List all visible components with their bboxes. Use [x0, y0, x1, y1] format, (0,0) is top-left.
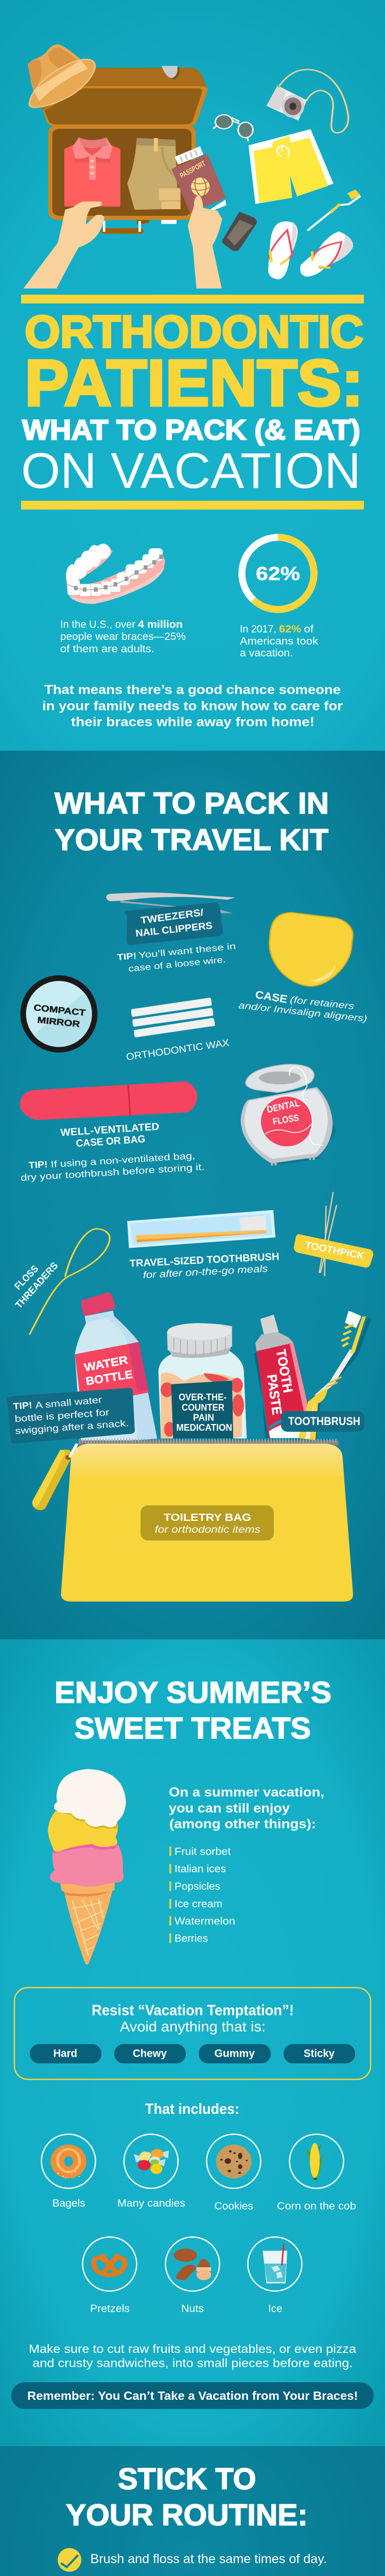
conclusion text: in your family needs to know how to care for	[42, 699, 343, 713]
checklist item 1: Brush and floss at the same times of day.	[91, 2552, 327, 2566]
icon: toothpaste tube: TOOTH	[273, 1348, 296, 1394]
suitcase base and handle	[48, 125, 196, 234]
label: case: CASE	[254, 989, 288, 1006]
callout: water bottle tip: A small water	[35, 1395, 102, 1411]
smartphone	[222, 212, 257, 251]
illustration: open suitcase with travel items	[23, 44, 360, 289]
label: case: and/or Invisalign aligners)	[238, 1000, 367, 1024]
icon: compact mirror: MIRROR	[37, 1015, 80, 1029]
passport and tickets	[171, 146, 226, 214]
label: tweezers and tip: You’ll want these in	[138, 941, 236, 960]
icon: toothpicks with label: TOOTHPICK	[304, 1240, 365, 1262]
stat: 62% took vacation: 62%	[279, 623, 301, 635]
label: orthodontic wax: ORTHODONTIC WAX	[126, 1038, 230, 1063]
donut chart: 62%: 62%	[256, 563, 300, 584]
icon: pretzel	[94, 2255, 125, 2275]
pill: hard: Hard	[54, 2047, 77, 2060]
callout: water bottle tip: TIP!	[13, 1400, 32, 1412]
title	[21, 295, 364, 510]
conclusion text	[42, 683, 343, 730]
label: floss threaders: THREADERS	[13, 1260, 60, 1311]
text: what you can still enjoy: (among other things):	[169, 1817, 316, 1832]
suitcase lid	[42, 66, 207, 126]
list: treats	[169, 1846, 235, 1944]
callout: water bottle tip	[7, 1388, 135, 1444]
list: treats: Berries	[174, 1933, 208, 1944]
sunglasses	[213, 115, 253, 141]
folded red shirt	[64, 137, 120, 207]
icon: corn on the cob	[306, 2143, 328, 2180]
icon: tweezers	[106, 892, 235, 913]
food grid: foods to avoid	[41, 2134, 356, 2314]
icon: toiletry bag: for orthodontic items	[154, 1524, 261, 1535]
heading: WHAT TO PACK IN	[55, 787, 329, 820]
label: travel-sized toothbrush: for after on-the-go meals	[143, 1263, 269, 1281]
stat: 62% took vacation: Americans took	[240, 636, 319, 647]
food labels: Corn on the cob	[277, 2201, 356, 2212]
camera with strap	[267, 70, 348, 133]
heading	[66, 2462, 308, 2532]
food labels	[52, 2198, 356, 2314]
callout: water bottle tip: bottle is perfect for	[14, 1407, 110, 1424]
label: ventilated case and tip: CASE OR BAG	[76, 1133, 146, 1149]
list: treats: Italian ices	[174, 1863, 226, 1875]
label: tweezers and tip: TIP!	[117, 951, 137, 962]
toothbrush	[308, 190, 360, 230]
illustration: teeth with braces	[66, 544, 165, 604]
pill: chewy	[114, 2044, 186, 2063]
text: cut food into small pieces: and crusty sandwiches, into small pieces before eating.	[32, 2357, 353, 2370]
heading	[55, 787, 329, 857]
callout: resist vacation temptation: Avoid anything that is:	[120, 2019, 266, 2035]
icon: pain medication jar	[159, 1323, 247, 1438]
panel: hero introduction	[0, 0, 385, 751]
flip flop right	[300, 231, 353, 277]
pill: hard	[30, 2044, 101, 2063]
banner: remember: Remember: You Can’t Take a Vacation from Your Braces!	[27, 2389, 358, 2402]
icon: pain medication jar: OVER-THE-	[179, 1392, 226, 1402]
stat: 62% took vacation: a vacation.	[240, 648, 293, 659]
conclusion text: That means there’s a good chance someone	[44, 683, 341, 697]
label: ventilated case and tip: TIP!	[28, 1159, 48, 1171]
food labels: Pretzels	[90, 2303, 130, 2314]
icon: pain medication jar: PAIN	[193, 1413, 214, 1423]
icon: ventilated case	[20, 1081, 197, 1120]
title: ON VACATION	[21, 443, 361, 499]
list: treats: Fruit sorbet	[174, 1846, 231, 1858]
heading: STICK TO	[118, 2462, 256, 2496]
label: case: (for retainers	[290, 994, 355, 1011]
icon: water bottle	[75, 1292, 157, 1444]
stat: 4 million wear braces: people wear braces—25%	[60, 631, 186, 642]
food labels: Nuts	[181, 2303, 204, 2314]
heading: YOUR TRAVEL KIT	[55, 823, 328, 857]
pill: sticky	[284, 2044, 355, 2063]
label: ventilated case and tip: WELL-VENTILATED	[60, 1121, 160, 1139]
label: ventilated case and tip: dry your toothbrush before storing it.	[21, 1162, 205, 1183]
hand holding passport	[188, 195, 222, 289]
label: case	[238, 989, 367, 1024]
icon: retainer case	[269, 912, 353, 986]
title: WHAT TO PACK (& EAT)	[22, 414, 360, 446]
icon: floss threader	[29, 1229, 110, 1334]
food labels: Bagels	[52, 2198, 85, 2209]
icon: toiletry bag: TOILETRY BAG	[164, 1512, 251, 1523]
pill: sticky: Sticky	[304, 2047, 335, 2060]
stat: 4 million wear braces: In the U.S., over	[60, 619, 135, 631]
hand holding suitcase	[23, 201, 104, 289]
icon: pain medication jar: COUNTER	[182, 1402, 224, 1413]
food labels: Many candies	[117, 2198, 185, 2209]
folded khaki shorts	[127, 138, 181, 210]
icon: pain medication jar: MEDICATION	[176, 1422, 232, 1433]
icon: cookie	[216, 2144, 251, 2178]
stat: 62% took vacation	[240, 623, 319, 659]
icon: compact mirror	[21, 975, 98, 1053]
text: what you can still enjoy	[169, 1785, 324, 1832]
icon: bagel	[50, 2144, 86, 2178]
stat: 62% took vacation: In 2017,	[240, 623, 276, 635]
callout: water bottle tip: swigging after a snack.	[15, 1418, 129, 1436]
icon: water bottle: BOTTLE	[85, 1367, 134, 1388]
icon: toothbrush	[299, 1311, 370, 1440]
label: tweezers and tip: NAIL CLIPPERS	[135, 920, 213, 939]
pill: chewy: Chewy	[133, 2047, 167, 2060]
label: tweezers and tip	[117, 903, 236, 974]
conclusion text: their braces while away from home!	[71, 715, 314, 730]
label: travel-sized toothbrush	[129, 1251, 279, 1281]
stat: 4 million wear braces: 4 million	[138, 619, 183, 631]
icon: toothpaste tube	[254, 1315, 316, 1438]
icon: water bottle: WATER	[83, 1353, 129, 1374]
banner: remember	[11, 2382, 374, 2409]
text: cut food into small pieces	[29, 2342, 356, 2370]
icon: travel toothbrush in package	[127, 1210, 275, 1248]
text: cut food into small pieces: Make sure to cut raw fruits and vegetables, or even pizza	[29, 2342, 356, 2355]
food labels: Ice	[268, 2303, 283, 2314]
text: what you can still enjoy: you can still enjoy	[169, 1801, 290, 1816]
icon: nuts	[174, 2249, 211, 2280]
label: ventilated case and tip: If using a non-ventilated bag,	[50, 1150, 196, 1170]
label: toothbrush	[281, 1411, 364, 1432]
icon: toothpaste tube: PASTE	[264, 1374, 285, 1416]
list: treats: Watermelon	[174, 1916, 235, 1927]
label: ventilated case and tip	[21, 1121, 205, 1183]
food labels: Cookies	[214, 2201, 253, 2212]
checklist item 1	[58, 2548, 327, 2572]
icon: toothpicks with label	[294, 1192, 373, 1276]
title: ORTHODONTIC	[25, 306, 363, 357]
passport label: PASSPORT	[179, 159, 207, 180]
pill: gummy: Gummy	[214, 2047, 255, 2060]
heading: ENJOY SUMMER’S	[55, 1676, 331, 1709]
icon: dental floss: DENTAL	[266, 1098, 301, 1115]
list: treats: Ice cream	[174, 1899, 222, 1910]
heading: YOUR ROUTINE:	[66, 2499, 308, 2532]
donut chart: 62%	[242, 537, 314, 609]
panel: stick to your routine	[0, 2446, 385, 2576]
icon: candies	[134, 2149, 169, 2174]
stat: 62% took vacation: of	[304, 623, 313, 635]
icon: toiletry bag	[32, 1440, 353, 1602]
icon: orthodontic wax	[131, 997, 215, 1038]
label: tweezers and tip: case of a loose wire.	[128, 955, 226, 974]
panel: enjoy summer's sweet treats	[0, 1639, 385, 2446]
label: toothbrush: TOOTHBRUSH	[288, 1415, 360, 1428]
stat: 4 million wear braces: of them are adults.	[60, 643, 154, 655]
title: PATIENTS:	[25, 346, 363, 419]
icon: dental floss	[240, 1064, 337, 1165]
callout: resist vacation temptation	[14, 1988, 371, 2079]
list: treats: Popsicles	[174, 1881, 220, 1892]
flip flop left	[268, 222, 297, 279]
heading: SWEET TREATS	[74, 1712, 311, 1745]
stat: 4 million wear braces	[60, 619, 186, 655]
icon: ice in glass	[262, 2245, 287, 2283]
callout: resist vacation temptation: Resist “Vacation Temptation”!	[92, 2002, 294, 2019]
label: travel-sized toothbrush: TRAVEL-SIZED TOOTHBRUSH	[129, 1251, 279, 1269]
icon: dental floss: FLOSS	[272, 1112, 300, 1127]
label: floss threaders: FLOSS	[12, 1263, 41, 1292]
pill: gummy	[199, 2044, 271, 2063]
hat	[28, 44, 95, 108]
text: what you can still enjoy: On a summer vacation,	[169, 1785, 324, 1800]
panel: what to pack in your travel kit	[0, 751, 385, 1639]
subheading: that includes: That includes:	[145, 2101, 239, 2117]
label: tweezers and tip: TWEEZERS/	[140, 907, 204, 926]
icon: ice cream cone	[48, 1769, 126, 1964]
yellow swim trunks	[249, 129, 334, 204]
icon: compact mirror: COMPACT	[33, 1003, 86, 1018]
heading	[55, 1676, 331, 1745]
